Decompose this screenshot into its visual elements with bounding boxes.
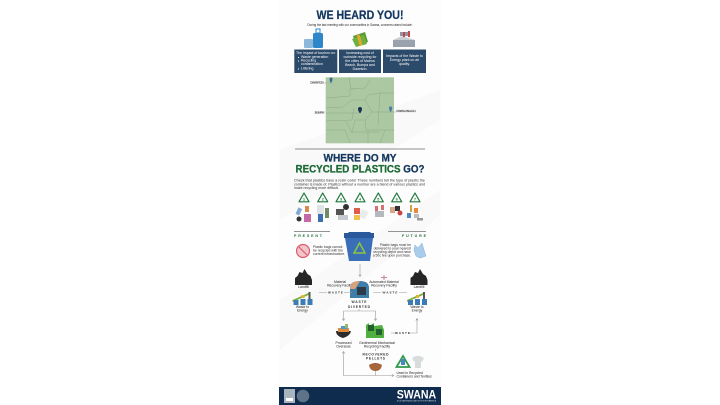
text: waste to energy right: Energy	[412, 308, 423, 312]
resin code symbols	[299, 193, 420, 202]
recovered pellets label: PELLETS	[366, 356, 386, 360]
icon: waste to energy right	[407, 292, 427, 305]
icon: no plastic bags	[296, 244, 310, 258]
future heading: FUTURE	[402, 234, 427, 238]
label: dawnton	[310, 78, 332, 84]
text: future bags: a 50c fee upon purchase.	[373, 254, 411, 258]
text: future bags: delivered to your nearest	[374, 246, 411, 250]
logo: swana: SOLID WASTE ASSOCIATION OF NORTH AMERICA	[397, 400, 437, 402]
label: bumpa: BUMPA	[315, 110, 324, 114]
waste arrow left: WASTE	[328, 290, 343, 294]
label: mabna beach	[389, 106, 416, 113]
panel: tourism impact: contamination	[301, 62, 323, 66]
panel: waste to energy	[383, 50, 426, 73]
text: present bags: Plastic bags cannot	[313, 245, 342, 249]
text: future bags: recycling depot and have	[373, 250, 411, 254]
resin code symbols: 3	[340, 196, 343, 201]
panel: waste to energy: Impacts of the Waste to	[386, 54, 423, 58]
icon: mechanical recycling facility	[366, 323, 384, 338]
waste arrow up to energy	[391, 318, 418, 335]
text: automated material recovery facility: Recovery Facility	[371, 284, 397, 288]
panel: curbside cost: Increasing cost of	[346, 51, 374, 55]
title: where do my recycled plastics go: RECYCLED PLASTICS GO?	[296, 164, 425, 176]
text: waste to energy right: Waste to	[410, 305, 424, 309]
panel: curbside cost: Dawnton.	[353, 67, 367, 71]
present heading: PRESENT	[294, 234, 323, 238]
text: automated material recovery facility: Automated Material	[369, 280, 399, 284]
logo: university crest	[284, 389, 295, 403]
map	[326, 77, 394, 143]
intro paragraph: container is made of. Plastics without a number are a blend of various plastics and	[294, 182, 425, 186]
panel: curbside cost	[339, 50, 381, 73]
text: mechanical recycling facility: Recycling Facility	[364, 344, 390, 348]
subtitle: During the last meeting with our communities in Swana, concerns raised include:	[308, 23, 413, 27]
label: dawnton: DAWNTON	[310, 80, 324, 84]
resin code symbols: 5	[377, 196, 380, 201]
title: where do my recycled plastics go: WHERE DO MY	[324, 152, 397, 164]
text: present bags: current infrastructure.	[313, 252, 345, 256]
panel: curbside cost: curbside recycling for	[343, 55, 377, 59]
panel: waste to energy: Energy plant on air	[390, 58, 420, 62]
text: waste to energy left: Waste to	[296, 305, 309, 309]
text: material recovery facility: Material	[334, 280, 346, 284]
text: material recovery facility: Recovery Facility	[327, 284, 353, 288]
icon: recovery facility	[350, 281, 369, 298]
text: processed overseas: Processed	[335, 341, 352, 345]
icon: luggage	[304, 29, 323, 48]
text: landfill right: Landfill	[414, 285, 425, 289]
panel: curbside cost: Beach, Bumpa and	[345, 63, 375, 67]
text: future bags: Plastic bags must be	[380, 243, 411, 247]
icon: landfill right	[410, 269, 428, 285]
panel: curbside cost: the cities of Mabna	[345, 59, 375, 63]
intro paragraph: make recycling more difficult.	[294, 186, 339, 190]
arrow: bin to facility	[359, 264, 361, 276]
panel: tourism impact: The impact of tourism on:	[296, 51, 336, 55]
icon: waste to energy plant	[393, 31, 415, 47]
arrows: diverted split	[342, 309, 377, 320]
arrows: pellets to products	[342, 349, 394, 377]
resin code symbols: 4	[359, 196, 362, 201]
waste arrow up to energy: WASTE	[395, 331, 410, 335]
text: mechanical recycling facility: Geothermal Mechanical	[359, 341, 395, 345]
icon: landfill left	[295, 269, 312, 285]
text: waste to energy left: Energy	[297, 308, 308, 312]
text: used in recycled containers: Used in Recycled	[396, 371, 423, 375]
icon: plastic bag	[414, 243, 426, 258]
resin code symbols: 6	[396, 196, 399, 201]
panel background	[279, 0, 441, 405]
waste arrow right: WASTE	[382, 290, 398, 294]
label: bumpa	[314, 107, 362, 114]
icon: processed overseas ship	[336, 324, 351, 338]
waste diverted label: DIVERTED	[348, 305, 371, 309]
intro paragraph: Check that plastics have a resin code! These numbers tell the type of plastic the	[294, 178, 425, 182]
text: used in recycled containers: Containers and Textiles	[396, 374, 432, 378]
icon: money	[352, 32, 368, 47]
label: mabna beach: MABNA BEACH	[396, 109, 416, 113]
text: present bags: be recycled with the	[313, 248, 343, 252]
waste diverted label: WASTE	[352, 300, 367, 304]
present heading	[294, 231, 330, 238]
future heading	[388, 231, 427, 238]
resin code symbols: 2	[322, 196, 325, 201]
panel: tourism impact: Recycling	[301, 58, 316, 62]
plastic product icons	[295, 204, 423, 222]
text: processed overseas: Overseas	[336, 344, 351, 348]
recovered pellets label: RECOVERED	[362, 352, 389, 356]
panel: tourism impact	[294, 50, 337, 73]
resin code symbols: 7	[414, 196, 417, 201]
text: landfill left: Landfill	[298, 285, 309, 289]
icon: waste to energy left	[292, 292, 312, 305]
panel: tourism impact: Littering	[301, 66, 314, 70]
panel: waste to energy: quality.	[399, 62, 410, 66]
footer band	[279, 387, 441, 405]
title: we heard you: WE HEARD YOU!	[316, 10, 404, 22]
waste arrow left	[319, 290, 352, 294]
icon: recycled products	[396, 356, 424, 368]
icon: robotic arm	[381, 275, 387, 280]
waste arrow right	[373, 290, 407, 294]
icon: pellets	[369, 363, 382, 371]
title: where do my recycled plastics go	[296, 152, 425, 176]
resin code symbols: 1	[303, 196, 306, 201]
logo: swana: SWANA	[397, 390, 436, 402]
icon: recycling bin	[344, 232, 374, 261]
panel: tourism impact: Waste generation	[301, 55, 328, 59]
logo: seal	[297, 390, 309, 402]
